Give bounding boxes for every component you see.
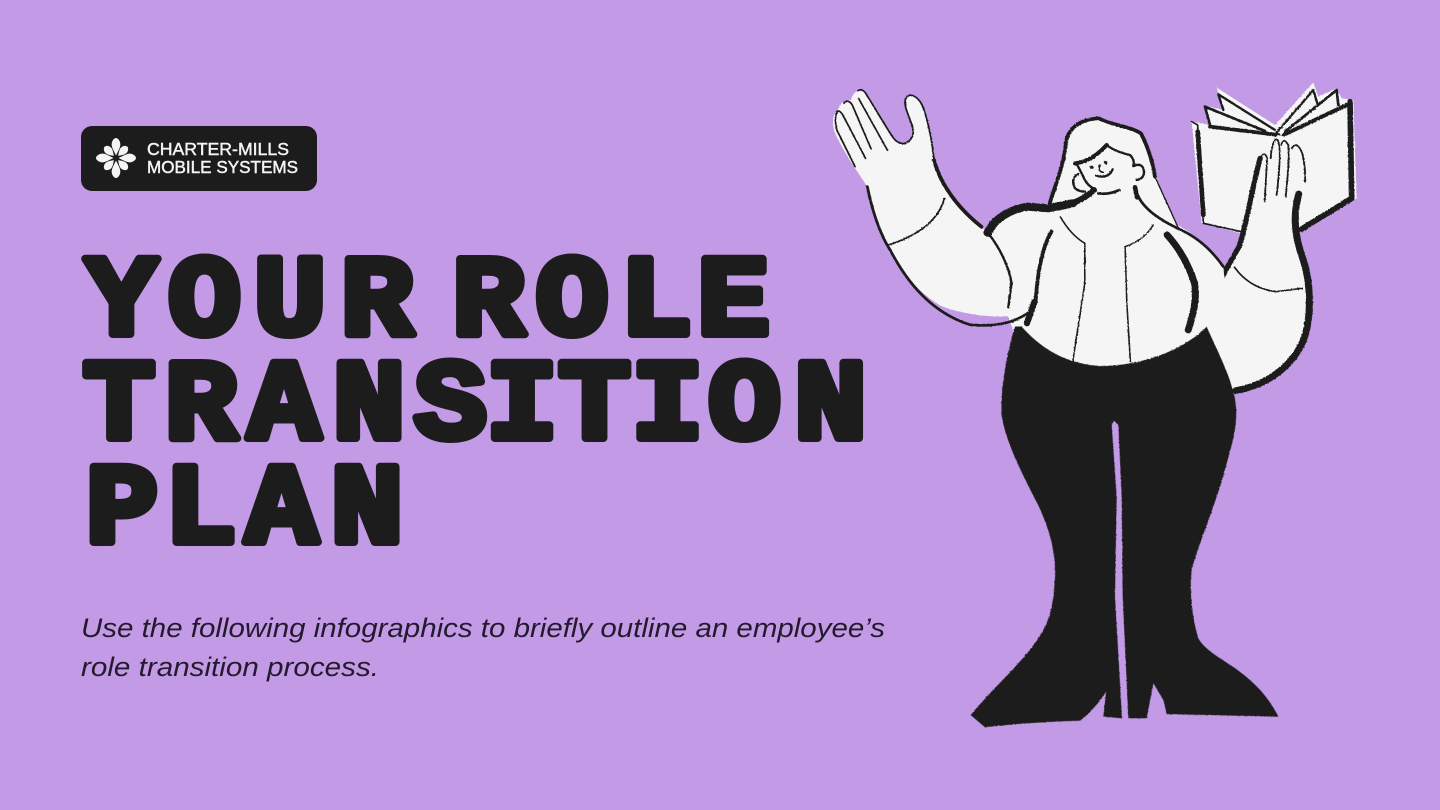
company name: CHARTER-MILLS: [147, 139, 289, 159]
subtitle text: [81, 613, 885, 682]
black flared trousers and boots: [971, 327, 1278, 727]
subtitle text: role transition process.: [81, 652, 379, 682]
icon: open book: [1192, 82, 1357, 233]
icon: flower logo: [96, 138, 136, 178]
face: [1060, 145, 1144, 207]
title: TRANSITION: [83, 344, 867, 473]
title: [83, 240, 867, 577]
title: PLAN: [86, 448, 403, 577]
illustration: woman holding a book: [833, 82, 1357, 727]
company name: MOBILE SYSTEMS: [147, 157, 298, 177]
title: YOUR ROLE: [85, 240, 770, 369]
subtitle text: Use the following infographics to briefly outline an employee’s: [81, 613, 885, 643]
company name: [147, 139, 298, 177]
company badge: [81, 126, 317, 191]
hair and torso: [988, 118, 1227, 370]
right arm and raised hand: [1171, 135, 1311, 392]
left arm and waving hand: [833, 90, 1073, 325]
